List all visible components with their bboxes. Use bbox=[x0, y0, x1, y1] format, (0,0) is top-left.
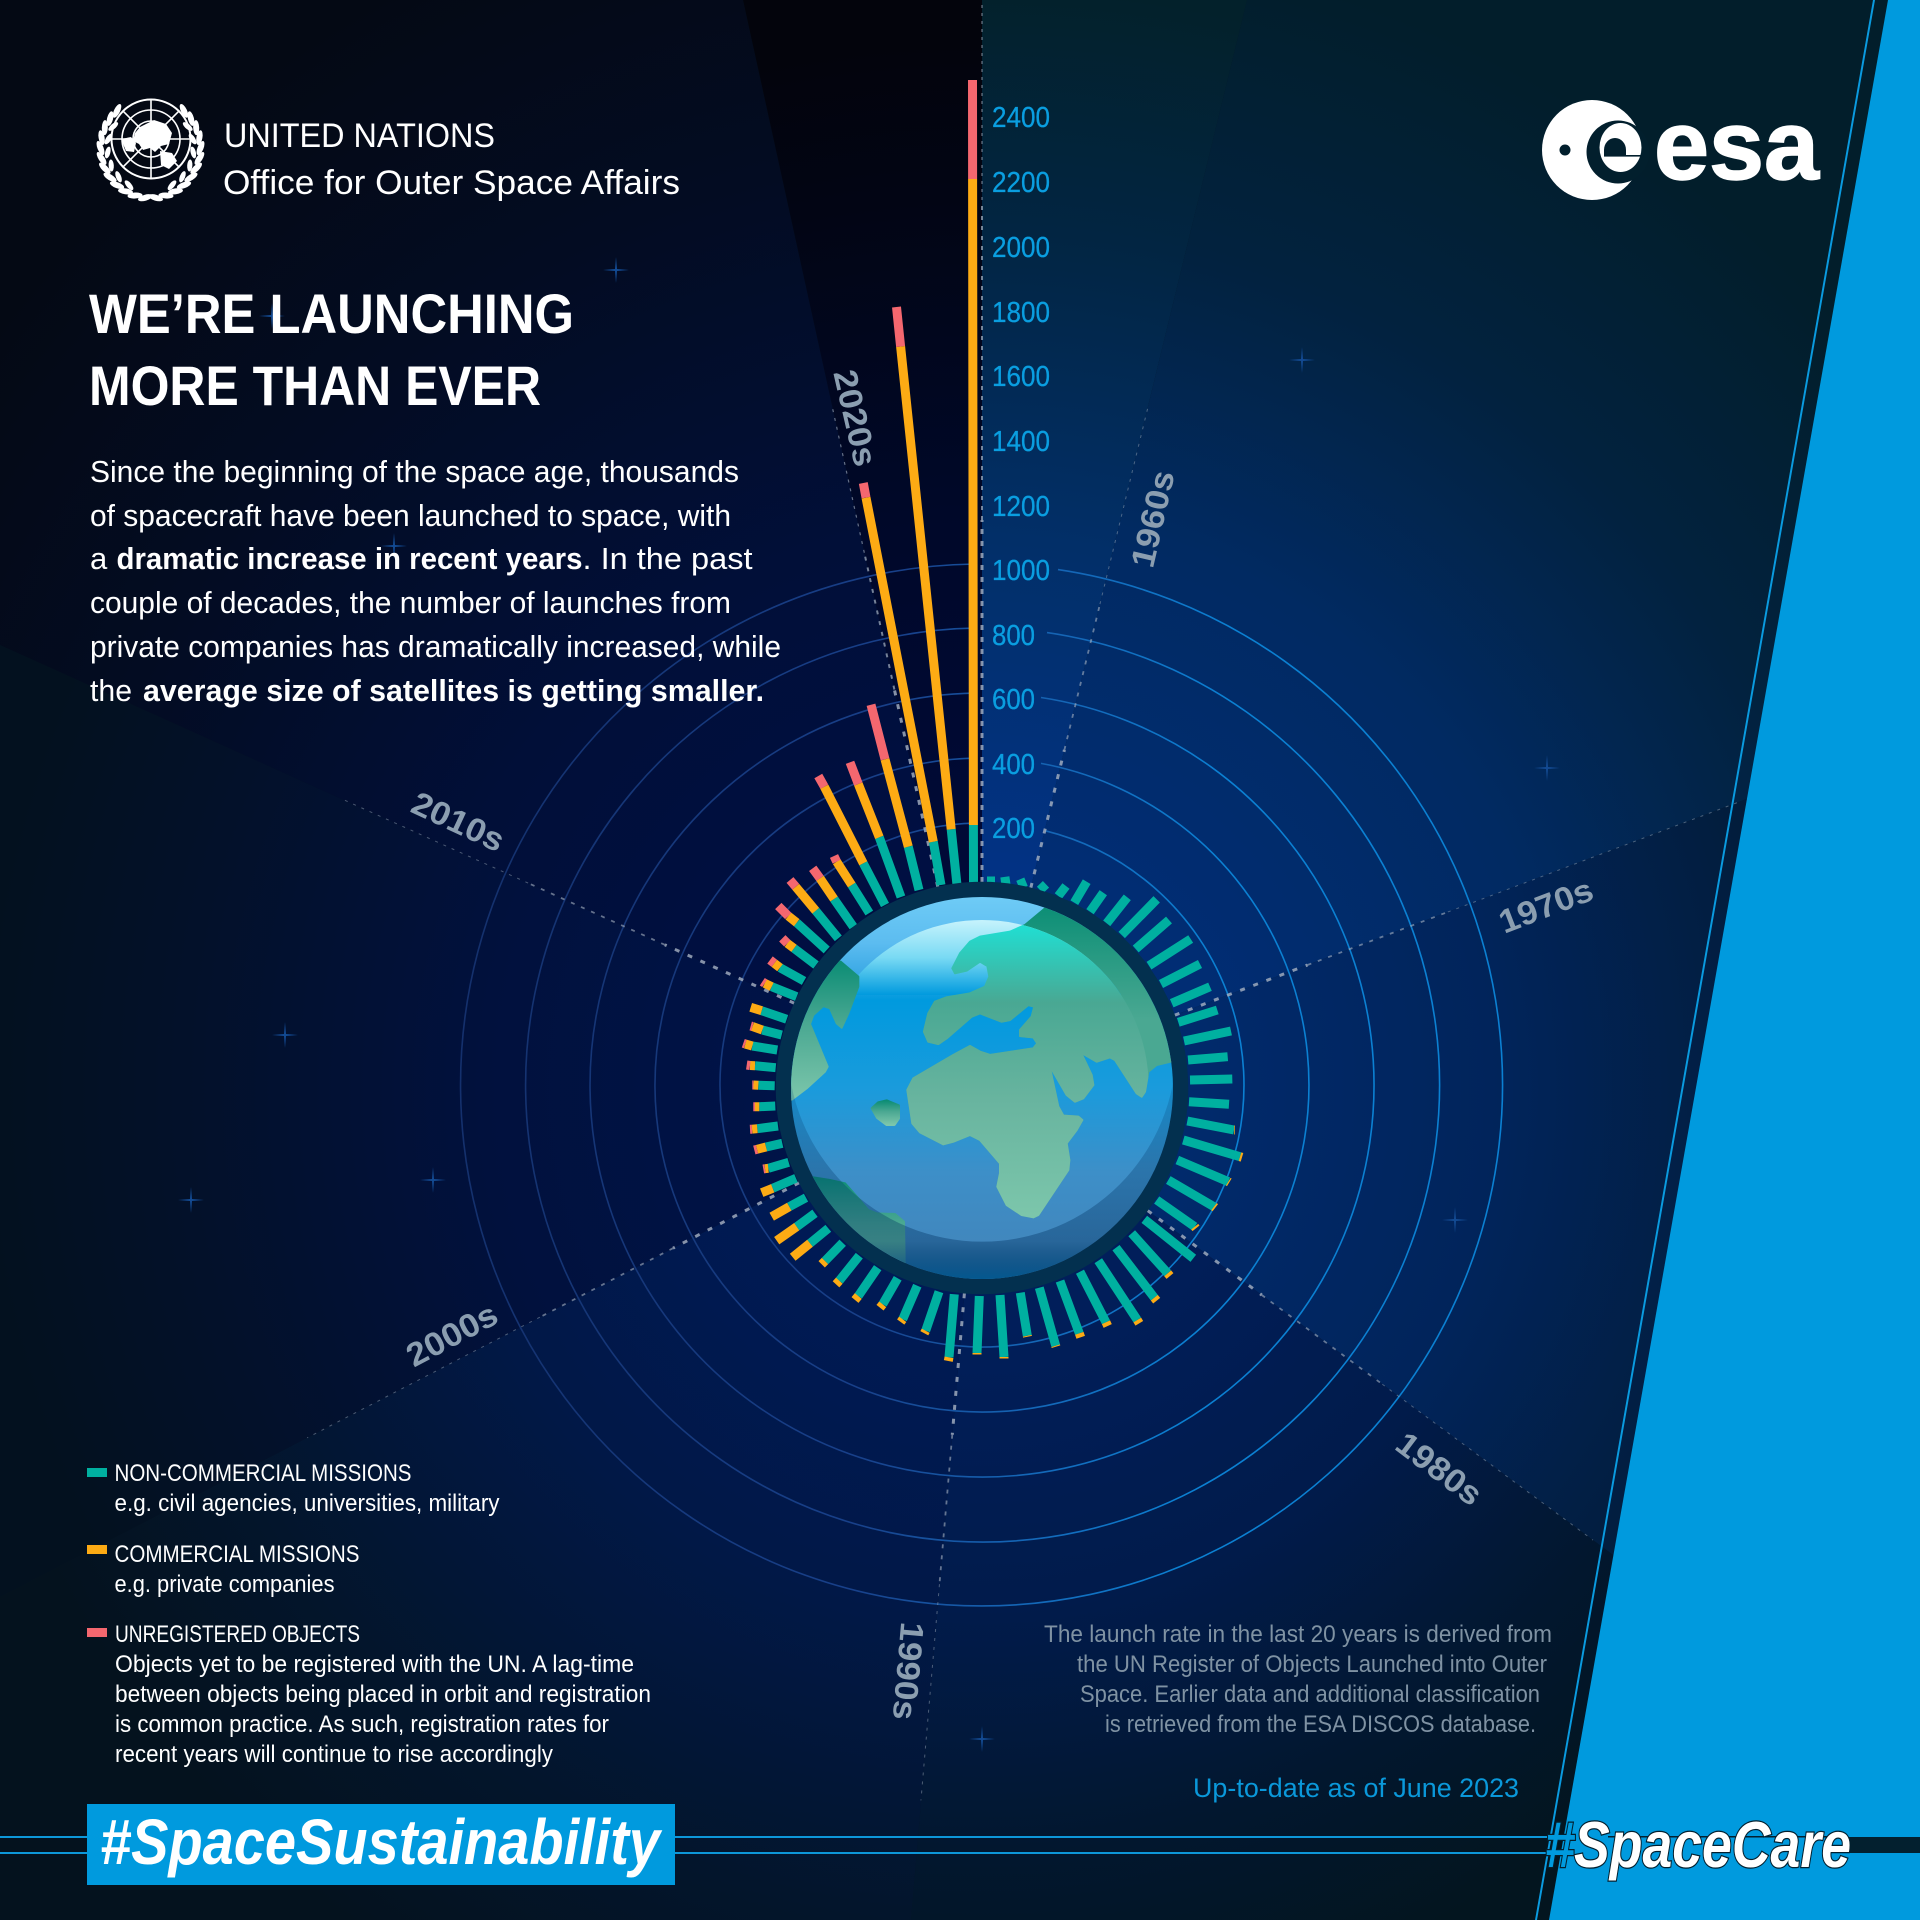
concentric scale rings bbox=[461, 564, 1503, 1606]
dark footer band on panel bbox=[1608, 1836, 1920, 1853]
data source note bbox=[1044, 1621, 1552, 1738]
legend item: commercial: COMMERCIAL MISSIONS bbox=[114, 1541, 360, 1568]
dark ring around globe bbox=[784, 890, 1180, 1286]
data source note: The launch rate in the last 20 years is derived from bbox=[1044, 1621, 1552, 1648]
data source note: is retrieved from the ESA DISCOS database. bbox=[1105, 1711, 1536, 1738]
radial axis scale labels: 2200 bbox=[992, 167, 1050, 199]
legend item: unregistered: is common practice. As such, registration rates for bbox=[115, 1711, 609, 1738]
blue corner panel bbox=[1549, 0, 1920, 1920]
intro paragraph: private companies has dramatically increased, while bbox=[90, 629, 781, 664]
background stars bbox=[178, 257, 1560, 1752]
decade labels: 2020s bbox=[826, 366, 885, 470]
radial axis scale labels: 2400 bbox=[992, 102, 1050, 134]
radial axis scale labels: 1600 bbox=[992, 361, 1050, 393]
UN logo bbox=[95, 100, 680, 203]
decade divider dotted lines bbox=[307, 0, 1739, 1800]
title: MORE THAN EVER bbox=[89, 354, 541, 417]
date note: Up-to-date as of June 2023 bbox=[1193, 1773, 1519, 1803]
hashtag: SpaceSustainability: #SpaceSustainability bbox=[100, 1806, 663, 1878]
decade labels: 2000s bbox=[400, 1295, 504, 1374]
legend item: unregistered: UNREGISTERED OBJECTS bbox=[115, 1621, 360, 1648]
intro paragraph: . In the past bbox=[582, 541, 753, 576]
radial axis scale labels: 1400 bbox=[992, 426, 1050, 458]
ESA logo: esa bbox=[1654, 90, 1821, 200]
decade labels: 1970s bbox=[1493, 871, 1598, 940]
title: WE’RE LAUNCHING bbox=[89, 282, 574, 345]
legend item: non-commercial: NON-COMMERCIAL MISSIONS bbox=[114, 1460, 412, 1487]
data source note: the UN Register of Objects Launched into Outer bbox=[1077, 1651, 1547, 1678]
radial axis scale labels: 600 bbox=[992, 684, 1035, 716]
radial axis scale labels: 200 bbox=[992, 813, 1035, 845]
ESA logo bbox=[1542, 90, 1821, 200]
decade labels: 2010s bbox=[406, 784, 510, 859]
legend bbox=[87, 1460, 651, 1768]
thin diagonal accent line bbox=[1535, 0, 1875, 1920]
horizontal footer lines bbox=[0, 1836, 1560, 1854]
radial axis scale labels bbox=[992, 102, 1050, 845]
legend item: unregistered: Objects yet to be registered with the UN. A lag-time bbox=[115, 1651, 634, 1678]
earth bbox=[791, 897, 1173, 1279]
legend item: commercial bbox=[87, 1541, 360, 1598]
globe with ring bbox=[784, 853, 1180, 1286]
legend item: unregistered: recent years will continue to rise accordingly bbox=[115, 1741, 553, 1768]
intro paragraph: average size of satellites is getting smaller. bbox=[143, 673, 764, 708]
unregistered segments bbox=[743, 80, 973, 1169]
UN wordmark bbox=[223, 117, 680, 202]
title bbox=[89, 282, 574, 417]
intro paragraph: couple of decades, the number of launches from bbox=[90, 585, 731, 620]
UN emblem bbox=[95, 100, 206, 203]
hashtag: SpaceCare: # bbox=[1545, 1808, 1576, 1881]
radial axis scale labels: 800 bbox=[992, 620, 1035, 652]
decade labels: 1960s bbox=[1123, 467, 1182, 571]
hashtag: SpaceCare: SpaceCare bbox=[1574, 1808, 1851, 1881]
decade labels: 1980s bbox=[1389, 1424, 1490, 1513]
legend item: unregistered: between objects being placed in orbit and registration bbox=[115, 1681, 651, 1708]
intro paragraph: the bbox=[90, 673, 132, 708]
UN wordmark: Office for Outer Space Affairs bbox=[223, 164, 680, 202]
radial axis scale labels: 1000 bbox=[992, 555, 1050, 587]
decade labels: 1990s bbox=[886, 1621, 931, 1721]
intro paragraph: a bbox=[90, 541, 108, 576]
decade labels bbox=[400, 366, 1598, 1721]
radial bar chart: launches per year bbox=[743, 80, 1242, 1361]
intro paragraph: dramatic increase in recent years bbox=[116, 541, 582, 576]
radial axis scale labels: 2000 bbox=[992, 232, 1050, 264]
data source note: Space. Earlier data and additional classification bbox=[1080, 1681, 1540, 1708]
intro paragraph: Since the beginning of the space age, thousands bbox=[90, 454, 739, 489]
UN wordmark: UNITED NATIONS bbox=[224, 117, 495, 155]
commercial segments bbox=[745, 179, 1242, 1361]
radial axis scale labels: 1200 bbox=[992, 491, 1050, 523]
intro paragraph: of spacecraft have been launched to space, with bbox=[90, 498, 731, 533]
radial axis scale labels: 1800 bbox=[992, 297, 1050, 329]
legend item: non-commercial: e.g. civil agencies, universities, military bbox=[114, 1490, 500, 1517]
legend item: commercial: e.g. private companies bbox=[114, 1571, 334, 1598]
intro paragraph bbox=[90, 454, 781, 708]
non-commercial segments bbox=[752, 825, 1240, 1357]
legend item: unregistered bbox=[87, 1621, 651, 1768]
legend item: non-commercial bbox=[87, 1460, 500, 1517]
radial axis scale labels: 400 bbox=[992, 749, 1035, 781]
